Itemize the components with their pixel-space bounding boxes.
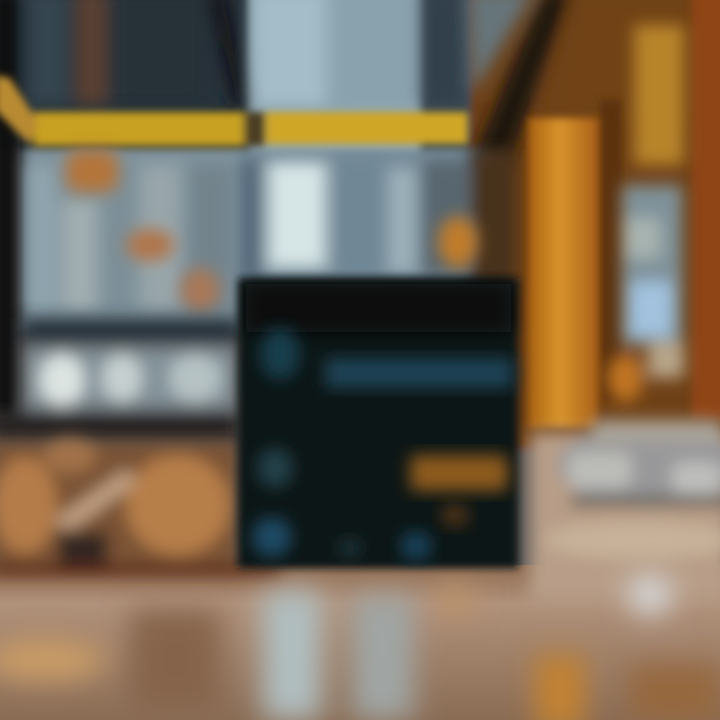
hanging lamps: orange glows [66,150,478,312]
floor reflections [0,575,720,720]
floor: polished reflective surface [0,565,720,720]
window: central bright pane [240,150,515,290]
orange band [410,455,508,491]
teal blob: middle left [257,448,293,488]
window: left panes with vertical mullions [28,165,230,310]
beam: yellow horizontal band [0,75,468,146]
upper wall detail [0,0,720,420]
right seating: grey curved counter [530,420,720,602]
teal blob: lower left [252,517,292,557]
left seating: orange sofas [0,437,280,576]
teal blob: upper left [260,328,300,380]
teal blob: lower centre [338,538,362,558]
left seating: white band above sofas [0,318,240,442]
teal band [325,358,513,388]
panel: dark display board [238,278,518,568]
top dark strip [246,284,511,332]
right wall: golden panel and blue window [607,25,684,402]
right wall: orange column [528,0,720,428]
orange blob [441,503,469,527]
teal blob: lower right [400,531,432,561]
